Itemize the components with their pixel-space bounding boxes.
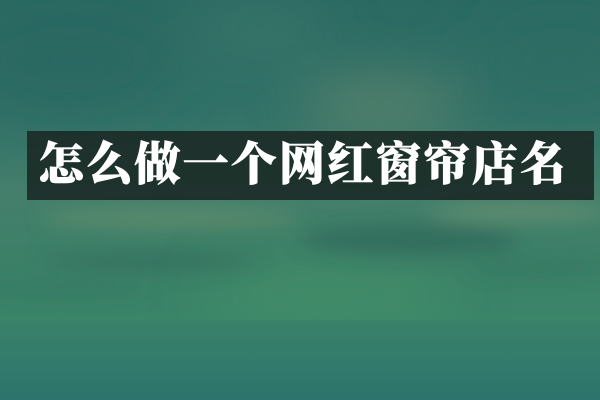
title: 怎么做一个网红窗帘店名 xyxy=(38,139,568,190)
title banner xyxy=(27,131,594,200)
